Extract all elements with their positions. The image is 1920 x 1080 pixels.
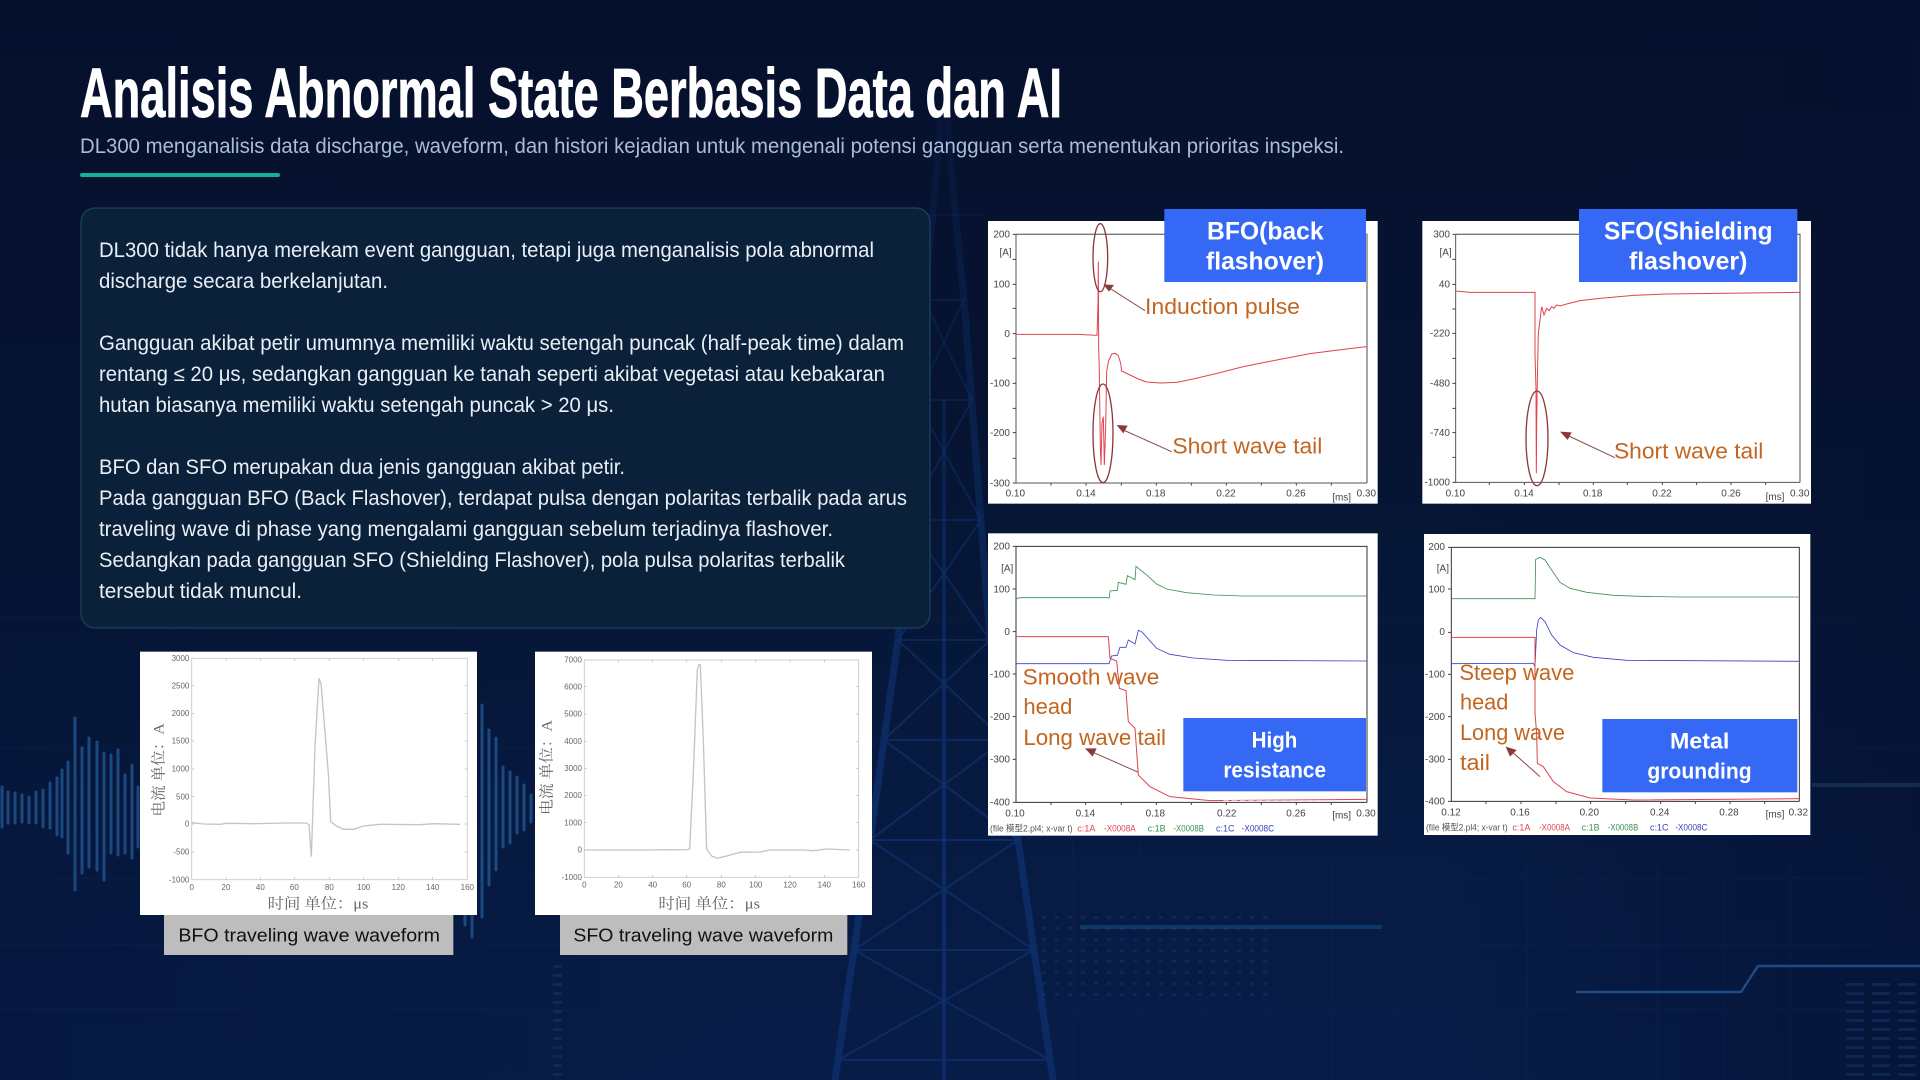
chart: BFO traveling wave waveform: -500 (173, 848, 190, 857)
label: high resistance: resistance (1223, 757, 1326, 782)
panel: explanation text: DL300 tidak hanya merekam event gangguan, tetapi juga menganalisis pola abnormal (99, 239, 874, 262)
chart: SFO shielding flashover: 0.26 (1721, 489, 1741, 500)
chart: BFO traveling wave waveform: 0 (185, 820, 190, 829)
title: Analisis Abnormal State Berbasis Data dan AI (80, 54, 1062, 132)
label: SFO (1579, 209, 1797, 282)
chart: SFO traveling wave waveform: 0 (578, 846, 583, 855)
chart: BFO traveling wave waveform: 80 (325, 883, 334, 892)
chart: high resistance: 0.26 (1286, 809, 1306, 820)
chart: high resistance: [ms] (1332, 810, 1351, 821)
legend: -X0008A (1104, 824, 1136, 834)
chart: BFO traveling wave waveform: 1500 (172, 737, 190, 746)
chart: metal grounding: 0.12 (1441, 808, 1461, 819)
chart: BFO back flashover: 0.18 (1146, 489, 1166, 500)
chart: metal grounding: [A] (1437, 564, 1449, 575)
chart: SFO traveling wave waveform: 电流 单位：A (538, 720, 556, 815)
legend: -X0008B (1608, 823, 1638, 833)
chart: high resistance: 0 (1004, 627, 1010, 638)
label: high resistance (1183, 718, 1366, 791)
chart: SFO shielding flashover: 0.22 (1652, 489, 1672, 500)
caption: BFO traveling wave waveform: BFO traveling wave waveform (178, 925, 440, 946)
chart: BFO traveling wave waveform: 160 (461, 883, 475, 892)
callout: induction pulse (1093, 224, 1300, 319)
panel: explanation text: Sedangkan pada gangguan SFO (Shielding Flashover), pola pulsa polaritas terbalik (99, 549, 845, 572)
chart: high resistance: 100 (993, 584, 1010, 595)
callout: smooth wave head, long wave tail: Long wave tail (1023, 725, 1166, 750)
chart: high resistance (988, 533, 1378, 836)
chart: SFO traveling wave waveform: 40 (648, 880, 658, 889)
callout: steep wave head, long wave tail: head (1460, 689, 1508, 714)
callout: induction pulse: Induction pulse (1145, 294, 1300, 319)
panel: explanation text: discharge secara berkelanjutan. (99, 270, 388, 293)
callout: steep wave head, long wave tail: Steep wave (1459, 660, 1574, 685)
chart: BFO back flashover: 0.26 (1286, 489, 1306, 500)
chart: metal grounding: 0.20 (1580, 808, 1599, 819)
traces: phase currents (1451, 557, 1799, 800)
chart: high resistance: 0.30 (1356, 809, 1376, 820)
chart: SFO traveling wave waveform: 0 (582, 880, 587, 889)
chart: BFO traveling wave waveform: 2000 (172, 709, 190, 718)
callout: steep wave head, long wave tail: Long wave (1460, 720, 1565, 745)
chart: SFO shielding flashover: 0.18 (1583, 489, 1603, 500)
panel: explanation text: hutan biasanya memiliki waktu setengah puncak > 20 μs. (99, 394, 614, 417)
label: SFO: SFO(Shielding (1604, 218, 1773, 245)
callout: short wave tail: Short wave tail (1614, 438, 1763, 463)
chart: SFO shielding flashover: 0.10 (1446, 489, 1465, 500)
chart: SFO shielding flashover: -740 (1430, 428, 1450, 439)
subtitle: DL300 menganalisis data discharge, waveform, dan histori kejadian untuk mengenali potensi gangguan serta menentukan prioritas inspeksi. (80, 134, 1344, 158)
chart: high resistance: 0.18 (1146, 809, 1165, 820)
chart: SFO traveling wave waveform: 20 (614, 880, 623, 889)
chart: high resistance: -100 (990, 669, 1010, 680)
legend: -X0008C (1675, 823, 1708, 833)
chart: BFO traveling wave waveform: 40 (256, 883, 265, 892)
chart: SFO shielding flashover: 300 (1433, 230, 1450, 241)
chart: SFO shielding flashover: [A] (1439, 247, 1452, 258)
chart: SFO traveling wave waveform: 80 (717, 880, 726, 889)
label: metal grounding: Metal (1670, 729, 1729, 754)
chart: metal grounding: 0.16 (1510, 808, 1530, 819)
chart: BFO back flashover: 0.10 (1006, 489, 1025, 500)
chart: BFO traveling wave waveform: 电流 单位：A (149, 723, 167, 817)
chart: BFO back flashover: 0.14 (1076, 489, 1096, 500)
chart: BFO traveling wave waveform (140, 652, 477, 915)
chart: BFO back flashover: -300 (990, 478, 1010, 489)
chart: SFO shielding flashover: 40 (1439, 280, 1450, 291)
chart: SFO shielding flashover: -1000 (1424, 478, 1450, 489)
circuit lines (1080, 785, 1920, 992)
chart: metal grounding (1424, 534, 1810, 835)
chart: BFO traveling wave waveform: 2500 (172, 681, 190, 690)
chart: BFO back flashover: [A] (999, 247, 1012, 258)
waveform bars (2, 705, 531, 937)
chart: BFO traveling wave waveform: 140 (426, 883, 440, 892)
chart: BFO traveling wave waveform: 时间 单位：μs (268, 895, 369, 912)
chart: SFO traveling wave waveform (535, 652, 872, 915)
chart: BFO back flashover (988, 209, 1378, 504)
chart: high resistance: -300 (990, 755, 1010, 766)
chart: SFO traveling wave waveform: 2000 (564, 791, 583, 800)
panel: explanation text: BFO dan SFO merupakan dua jenis gangguan akibat petir. (99, 456, 625, 479)
chart: BFO traveling wave waveform: 60 (290, 883, 299, 892)
label: BFO: flashover) (1206, 248, 1324, 275)
label: metal grounding: grounding (1647, 758, 1752, 783)
chart: BFO back flashover: -200 (990, 428, 1010, 439)
chart: SFO shielding flashover: -480 (1430, 379, 1450, 390)
chart: SFO traveling wave waveform: -1000 (562, 873, 583, 882)
chart: SFO traveling wave waveform: 6000 (564, 682, 583, 691)
chart: metal grounding: 200 (1428, 542, 1445, 553)
chart: SFO traveling wave waveform: 120 (783, 880, 797, 889)
chart: metal grounding: -300 (1425, 755, 1445, 766)
callout: smooth wave head, long wave tail: head (1023, 694, 1072, 719)
legend: c:1A (1077, 824, 1095, 834)
label: high resistance: High (1252, 728, 1297, 753)
legend: c:1C (1216, 824, 1235, 834)
panel: explanation text: tersebut tidak muncul. (99, 580, 302, 603)
chart: BFO back flashover: 200 (993, 230, 1010, 241)
callout: short wave tail: Short wave tail (1172, 433, 1322, 458)
callout: smooth wave head, long wave tail: Smooth wave (1023, 664, 1159, 689)
legend: -X0008C (1242, 824, 1274, 834)
trace: fault current (1456, 291, 1800, 473)
chart: SFO traveling wave waveform: 160 (852, 880, 866, 889)
chart: BFO traveling wave waveform: 20 (222, 883, 231, 892)
chart: BFO back flashover: 100 (993, 280, 1010, 291)
panel: explanation text: rentang ≤ 20 μs, sedangkan gangguan ke tanah seperti akibat vegetasi atau kebakaran (99, 363, 885, 386)
chart: BFO traveling wave waveform: 100 (357, 883, 371, 892)
chart: BFO traveling wave waveform: 500 (176, 792, 190, 801)
legend (1426, 823, 1708, 833)
callout: steep wave head, long wave tail (1459, 660, 1574, 777)
chart: BFO back flashover: -100 (990, 379, 1010, 390)
legend (990, 824, 1274, 834)
panel: explanation text: Pada gangguan BFO (Back Flashover), terdapat pulsa dengan polaritas terbalik pada arus (99, 487, 907, 510)
legend: (file 模型2.pl4; x-var t) (1426, 823, 1508, 833)
label: BFO (1164, 209, 1366, 282)
caption: BFO traveling wave waveform (164, 915, 453, 955)
chart: SFO shielding flashover: 0.30 (1790, 489, 1810, 500)
callout: steep wave head, long wave tail: tail (1460, 750, 1490, 775)
chart: metal grounding: -100 (1425, 669, 1445, 680)
chart: SFO traveling wave waveform: 5000 (564, 710, 583, 719)
legend: -X0008B (1173, 824, 1204, 834)
chart: SFO traveling wave waveform: 1000 (564, 818, 583, 827)
chart: metal grounding: -400 (1425, 797, 1445, 808)
legend: c:1C (1650, 823, 1669, 833)
callout: short wave tail (1093, 384, 1322, 483)
chart: BFO back flashover: [ms] (1332, 493, 1351, 504)
chart: high resistance: 0.22 (1217, 809, 1237, 820)
chart: high resistance: 0.14 (1076, 809, 1095, 820)
chart: metal grounding: 0.32 (1789, 808, 1808, 819)
label: BFO: BFO(back (1207, 218, 1324, 245)
trace: fault current (1016, 262, 1367, 465)
chart: metal grounding: -200 (1425, 712, 1445, 723)
chart: metal grounding: [ms] (1766, 810, 1785, 821)
chart: high resistance: [A] (1001, 564, 1014, 575)
chart: SFO traveling wave waveform: 60 (682, 880, 692, 889)
chart: metal grounding: 100 (1428, 584, 1445, 595)
panel: explanation text: traveling wave di phase yang mengalami gangguan sebelum terjadinya flashover. (99, 518, 833, 541)
legend: c:1A (1512, 823, 1530, 833)
label: metal grounding (1602, 719, 1797, 792)
chart: metal grounding: 0.24 (1650, 808, 1670, 819)
legend: c:1B (1582, 823, 1600, 833)
chart: high resistance: 200 (993, 542, 1010, 553)
chart: SFO traveling wave waveform: 时间 单位：μs (658, 895, 760, 912)
chart: high resistance: -200 (990, 712, 1010, 723)
chart: BFO back flashover: 0.22 (1216, 489, 1236, 500)
chart: SFO traveling wave waveform: 100 (749, 880, 763, 889)
accent bar (80, 173, 280, 177)
chart: metal grounding: 0 (1439, 627, 1445, 638)
chart: SFO traveling wave waveform: 140 (818, 880, 832, 889)
legend: (file 模型2.pl4; x-var t) (990, 824, 1073, 834)
callout: short wave tail (1526, 391, 1763, 486)
chart: BFO traveling wave waveform: 0 (189, 883, 194, 892)
chart: SFO shielding flashover: -220 (1430, 329, 1450, 340)
callout: smooth wave head, long wave tail (1023, 664, 1166, 772)
caption: SFO traveling wave waveform (560, 915, 847, 955)
tower silhouette (835, 117, 1053, 1080)
chart: SFO traveling wave waveform: 3000 (564, 764, 583, 773)
chart: BFO traveling wave waveform: -1000 (169, 875, 190, 884)
chart: SFO traveling wave waveform: 7000 (564, 656, 583, 665)
chart: SFO shielding flashover (1422, 209, 1811, 504)
chart: BFO back flashover: 0 (1004, 329, 1010, 340)
label: SFO: flashover) (1629, 248, 1747, 275)
chart: high resistance: 0.10 (1005, 809, 1025, 820)
panel: explanation text (81, 208, 930, 628)
chart: BFO back flashover: 0.30 (1357, 489, 1376, 500)
caption: SFO traveling wave waveform: SFO traveling wave waveform (573, 925, 833, 946)
panel: explanation text: Gangguan akibat petir umumnya memiliki waktu setengah puncak (half-peak time) dalam (99, 332, 904, 355)
chart: SFO shielding flashover: [ms] (1766, 492, 1785, 503)
chart: SFO traveling wave waveform: 4000 (564, 737, 583, 746)
chart: BFO traveling wave waveform: 3000 (172, 654, 190, 663)
legend: -X0008A (1539, 823, 1570, 833)
chart: BFO traveling wave waveform: 120 (392, 883, 406, 892)
chart: high resistance: -400 (990, 798, 1010, 809)
chart: BFO traveling wave waveform: 1000 (172, 765, 190, 774)
chart: SFO shielding flashover: 0.14 (1514, 489, 1534, 500)
traces: phase currents (1016, 566, 1367, 801)
chart: metal grounding: 0.28 (1719, 808, 1739, 819)
legend: c:1B (1148, 824, 1166, 834)
